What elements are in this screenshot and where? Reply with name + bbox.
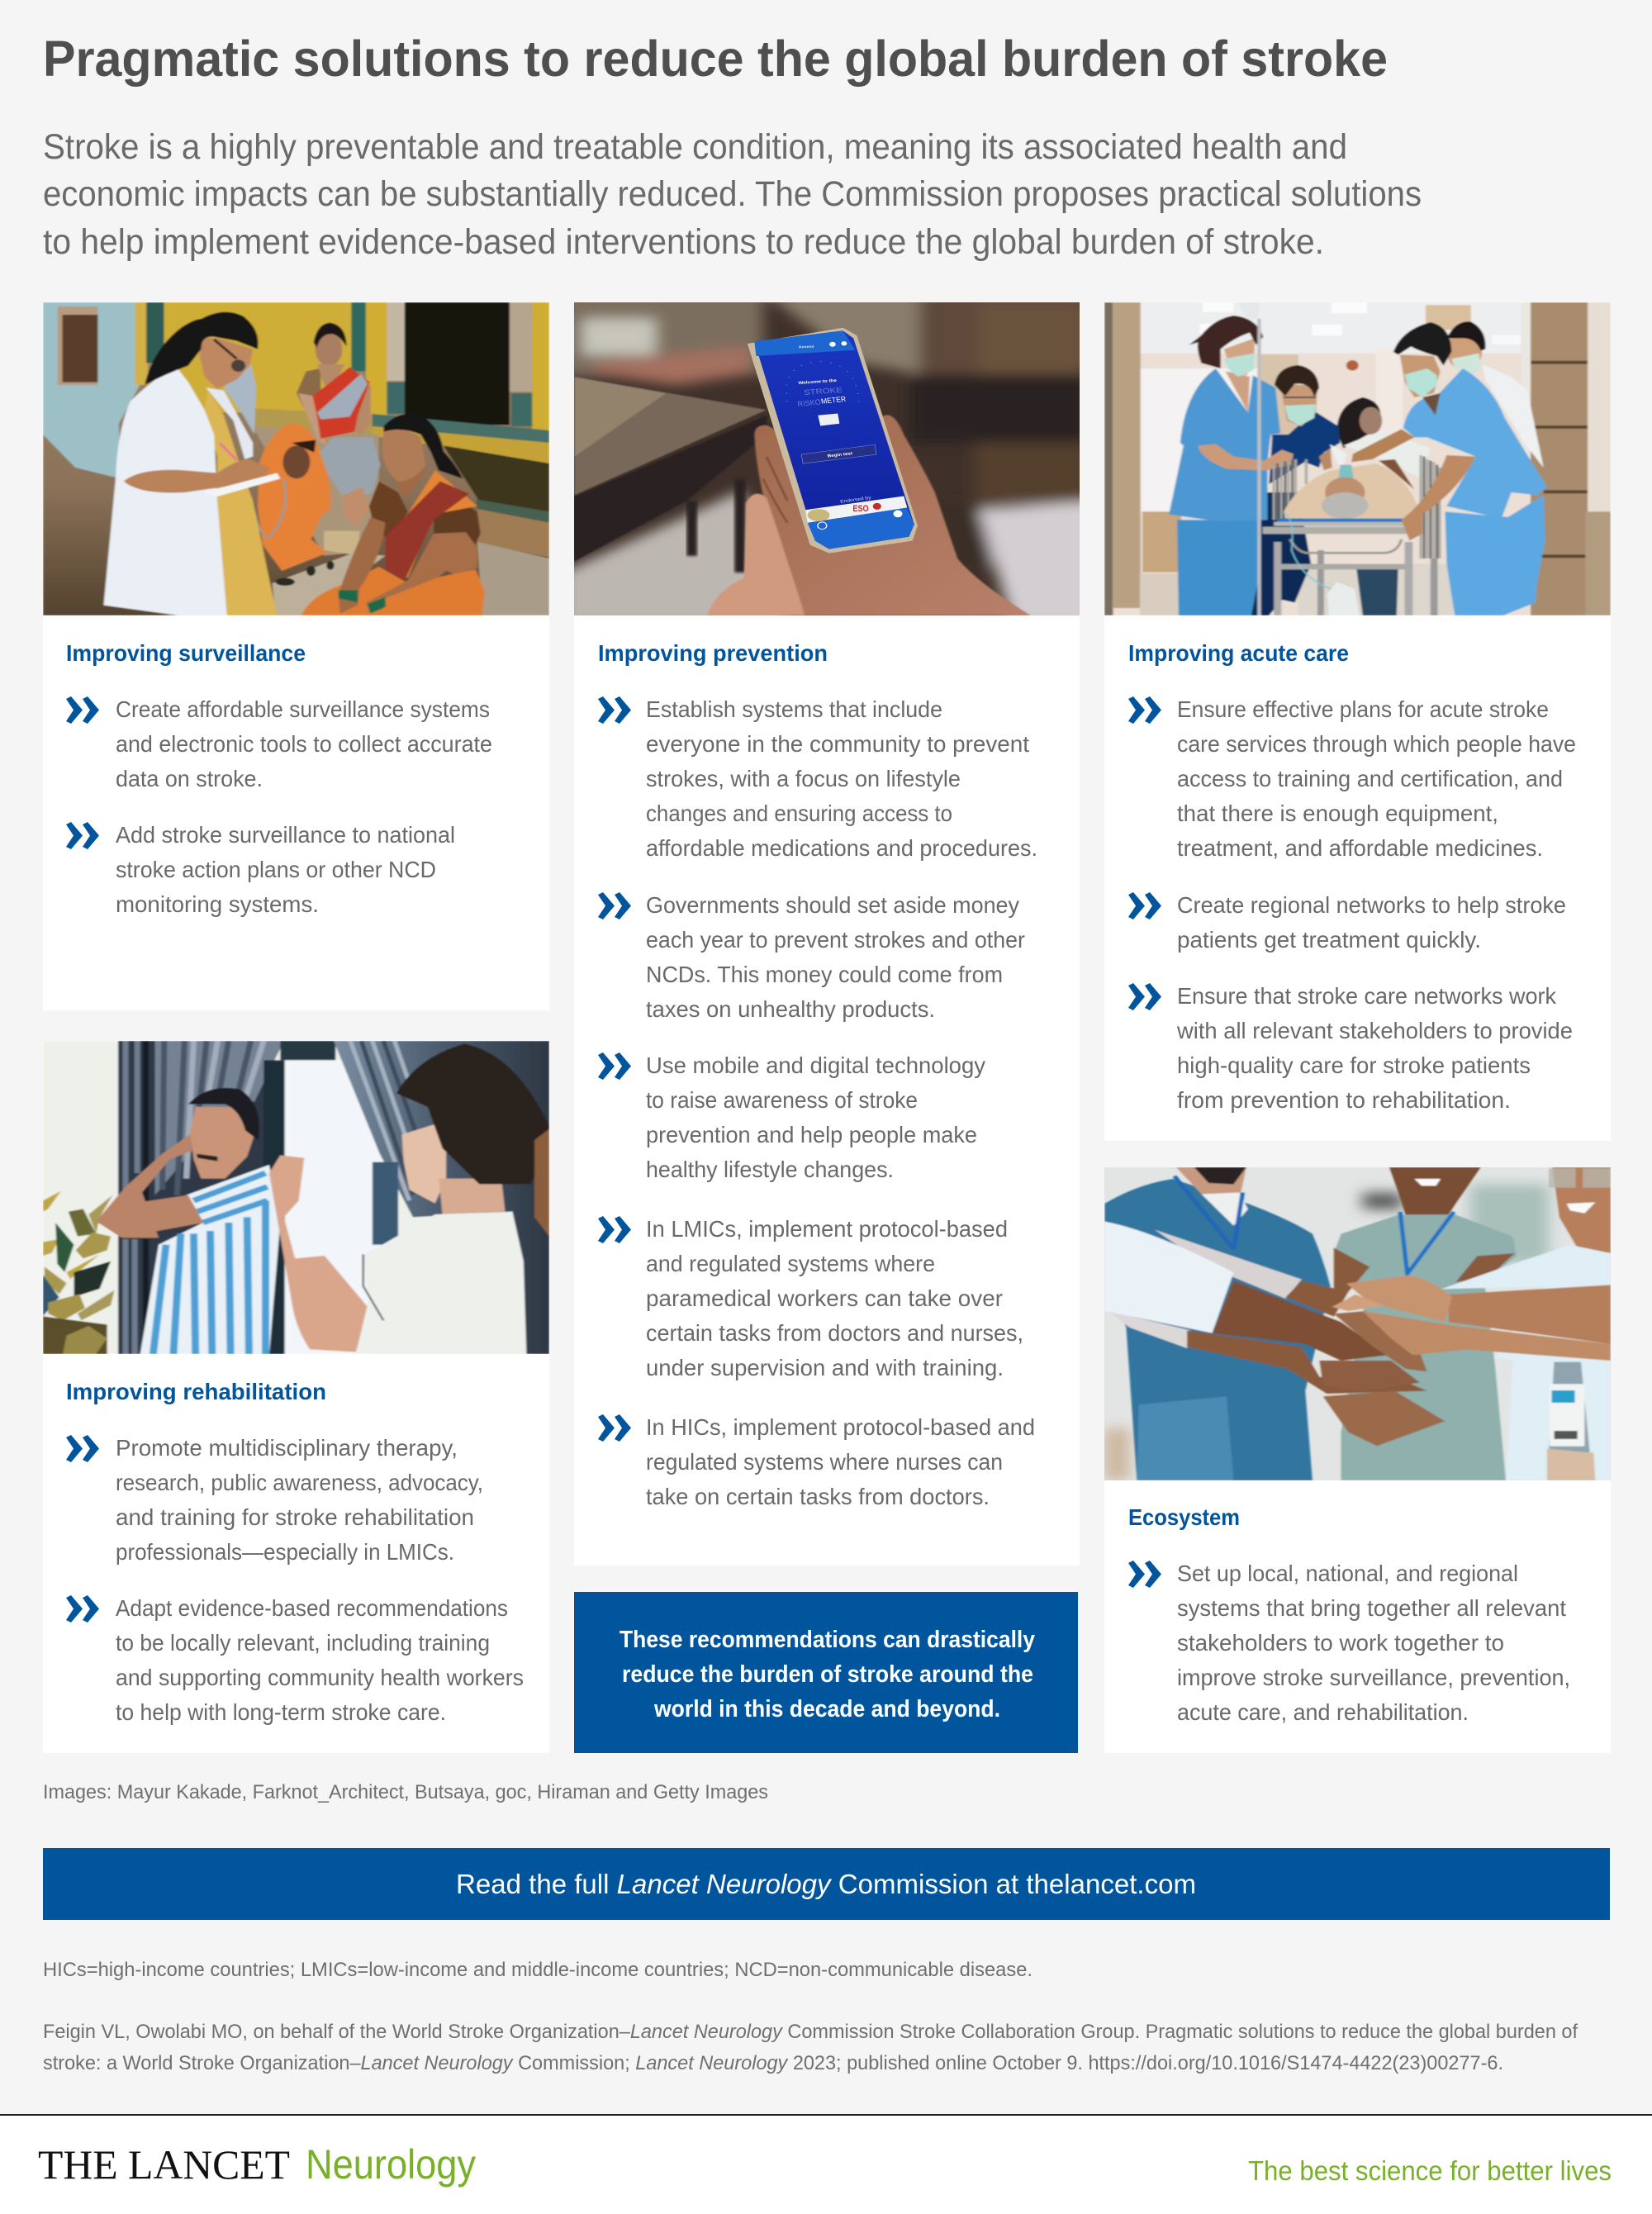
plant [43,1191,61,1212]
bullet: government funding: Governments should set aside money [646,892,1019,918]
bullet: LMIC task shifting: In LMICs, implement protocol-based [646,1216,1008,1242]
bullet: digital technology: prevention and help people make [646,1122,977,1147]
callout: recommendations: reduce the burden of stroke around the [622,1661,1033,1688]
bullet: acute stroke care plans: Ensure effective plans for acute stroke [1177,696,1549,722]
bullet: HIC task shifting: regulated systems where nurses can [646,1449,1003,1475]
tagline: The best science for better lives [1248,2155,1612,2186]
heading: Improving acute care [1128,640,1349,666]
bullet: local national regional systems: improve stroke surveillance, prevention, [1177,1665,1570,1690]
background woman [224,360,256,435]
bullet: national action plans [66,822,455,917]
bullet: affordable surveillance systems: Create affordable surveillance systems [116,696,490,722]
bullet: evidence-based recommendations: Adapt evidence-based recommendations [116,1595,508,1621]
phone: STROKE [804,387,843,397]
bullet: stakeholder networks: Ensure that stroke care networks work [1177,983,1556,1009]
intro text block: economic impacts can be substantially reduced. The Commission proposes practical solutions [43,174,1422,214]
bullet: multidisciplinary therapy: and training for stroke rehabilitation [116,1504,474,1530]
bullet: local national regional systems: acute care, and rehabilitation. [1177,1699,1469,1725]
phone: METER [820,396,847,406]
logo: The Lancet Neurology [38,2141,476,2188]
bullet: evidence-based recommendations: to be locally relevant, including training [116,1630,490,1656]
man in navy scrubs [1269,411,1340,484]
bullet: acute stroke care plans: treatment, and affordable medicines. [1177,835,1543,861]
bullet: affordable surveillance systems: and electronic tools to collect accurate [116,731,492,757]
bullet: digital technology: to raise awareness of stroke [646,1087,918,1113]
photo: man and woman stretching [43,1041,549,1354]
bullet: evidence-based recommendations: and supporting community health workers [116,1665,524,1690]
logo: The Lancet Neurology: Neurology [306,2141,476,2188]
panel: ecosystem [1104,1167,1611,1753]
title: Pragmatic solutions to reduce the global burden of stroke [43,31,1388,87]
bullet: community prevention systems: everyone in the community to prevent [646,731,1029,757]
bullet: community prevention systems [598,696,1037,861]
left nurse [1177,520,1259,615]
panel: improving rehabilitation [43,1041,549,1753]
bullet: community prevention systems: affordable medications and procedures. [646,835,1037,861]
bullet: regional networks: Create regional networks to help stroke [1177,892,1566,918]
bullet: HIC task shifting: take on certain tasks from doctors. [646,1484,990,1509]
heading: Ecosystem [1128,1504,1240,1530]
banner: read the full commission: Read the full Lancet Neurology Commission at thelancet.com [456,1869,1196,1899]
man [140,1165,280,1354]
bullet: multidisciplinary therapy: Promote multidisciplinary therapy, [116,1435,458,1461]
bullet: community prevention systems: strokes, with a focus on lifestyle [646,766,961,791]
citation [43,2021,1578,2074]
phone: Assess [798,344,814,349]
bullet: HIC task shifting [598,1414,1035,1509]
intro text block: Stroke is a highly preventable and treatable condition, meaning its associated health and [43,127,1347,167]
bullet: digital technology: healthy lifestyle changes. [646,1157,894,1182]
bullet: stakeholder networks: with all relevant stakeholders to provide [1176,1018,1573,1043]
bullet: LMIC task shifting: certain tasks from doctors and nurses, [646,1320,1023,1346]
bullet: local national regional systems: Set up local, national, and regional [1177,1561,1518,1586]
image credits: Images: Mayur Kakade, Farknot_Architect, Butsaya, goc, Hiraman and Getty Images [43,1781,768,1803]
bullet: evidence-based recommendations [66,1595,524,1725]
logo: The Lancet Neurology: THE LANCET [38,2141,290,2188]
photo: phone with stroke riskometer app [574,302,1080,615]
panel: improving acute care [1104,302,1611,1141]
bullet: LMIC task shifting [598,1216,1023,1380]
middle person [1334,1214,1517,1480]
panel: improving surveillance [43,302,549,1010]
bullet: stakeholder networks: from prevention to rehabilitation. [1177,1087,1511,1113]
left person scrubs [1104,1179,1331,1480]
photo: stacked hands [1104,1167,1611,1480]
heading: Improving surveillance [66,640,306,666]
seated right woman [369,482,408,542]
bullet: digital technology [598,1052,985,1182]
citation: stroke: a World Stroke Organization–Lancet Neurology Commission; Lancet Neurology 2023; published online October 9. https://doi.org/10.1016/S1474-4422(23)00277-6. [43,2052,1503,2074]
callout: recommendations [574,1592,1078,1753]
bullet: local national regional systems: stakeholders to work together to [1177,1630,1504,1656]
bullet: HIC task shifting: In HICs, implement protocol-based and [646,1414,1035,1440]
phone: Welcome to the [798,378,837,386]
stretcher rails [1274,455,1440,558]
bullet: national action plans: stroke action plans or other NCD [116,857,436,882]
phone [748,328,918,554]
bullet: community prevention systems: changes and ensuring access to [646,801,952,826]
hand [708,415,1031,615]
bullet: multidisciplinary therapy [66,1435,483,1565]
bullet: local national regional systems [1128,1561,1570,1725]
panel: improving prevention [562,292,1097,1565]
heading: Improving prevention [598,640,828,666]
bullet: national action plans: monitoring systems. [116,891,319,917]
bullet: government funding [598,892,1025,1022]
callout: recommendations: These recommendations can drastically [620,1627,1035,1653]
right person [1495,1251,1611,1480]
bullet: community prevention systems: Establish systems that include [646,696,942,722]
bullet: regional networks [1128,892,1566,953]
bullet: national action plans: Add stroke surveillance to national [116,822,455,848]
woman [269,1155,368,1352]
banner: read the full commission [43,1848,1610,1920]
intro text block: to help implement evidence-based interventions to reduce the global burden of stroke. [43,222,1324,262]
arms [1108,1311,1190,1348]
doctor behind [1482,364,1544,468]
phone: Endorsed by [840,496,872,505]
bullet: stakeholder networks: high-quality care for stroke patients [1177,1052,1531,1078]
bullet: LMIC task shifting: under supervision and with training. [646,1355,1004,1380]
patient [1284,463,1417,519]
bullet: LMIC task shifting: paramedical workers can take over [646,1285,1003,1311]
bullet: acute stroke care plans: care services through which people have [1177,731,1576,757]
footer [0,2114,1652,2214]
bullet: multidisciplinary therapy: research, public awareness, advocacy, [116,1470,483,1495]
bullet: acute stroke care plans: that there is enough equipment, [1177,801,1498,826]
seated orange woman [258,423,330,571]
bullet: acute stroke care plans [1128,696,1576,861]
bullet: affordable surveillance systems [66,696,492,791]
bullet: affordable surveillance systems: data on stroke. [116,766,263,791]
phone: ESO [852,503,869,514]
bullet: digital technology: Use mobile and digital technology [646,1052,985,1078]
bullet: local national regional systems: systems that bring together all relevant [1177,1595,1566,1621]
abbreviations note: HICs=high-income countries; LMICs=low-income and middle-income countries; NCD=non-communicable disease. [43,1959,1032,1981]
bullet: acute stroke care plans: access to training and certification, and [1177,766,1563,791]
bullet: stakeholder networks [1128,983,1573,1113]
bullet: regional networks: patients get treatment quickly. [1177,927,1481,953]
callout: recommendations: world in this decade and beyond. [653,1696,1000,1722]
heading: Improving rehabilitation [66,1379,326,1404]
citation: Feigin VL, Owolabi MO, on behalf of the World Stroke Organization–Lancet Neurology Commission Stroke Collaboration Group. Pragmatic solutions to reduce the global burden of [43,2021,1578,2043]
woman behind [1336,397,1380,449]
photo: doctor with village women [43,302,549,615]
phone: RISKO [797,398,822,409]
right nurse [1445,495,1545,615]
bullet: government funding: NCDs. This money could come from [646,962,1003,987]
phone: Begin test [827,452,853,458]
bullet: evidence-based recommendations: to help with long-term stroke care. [116,1699,446,1725]
bullet: government funding: taxes on unhealthy products. [646,996,935,1022]
bullet: multidisciplinary therapy: professionals—especially in LMICs. [116,1539,454,1565]
doctor [204,391,277,615]
photo: medical team with stretcher [1104,302,1611,615]
bullet: LMIC task shifting: and regulated systems where [646,1251,935,1276]
bullet: government funding: each year to prevent strokes and other [646,927,1025,953]
intro text block [43,127,1422,262]
